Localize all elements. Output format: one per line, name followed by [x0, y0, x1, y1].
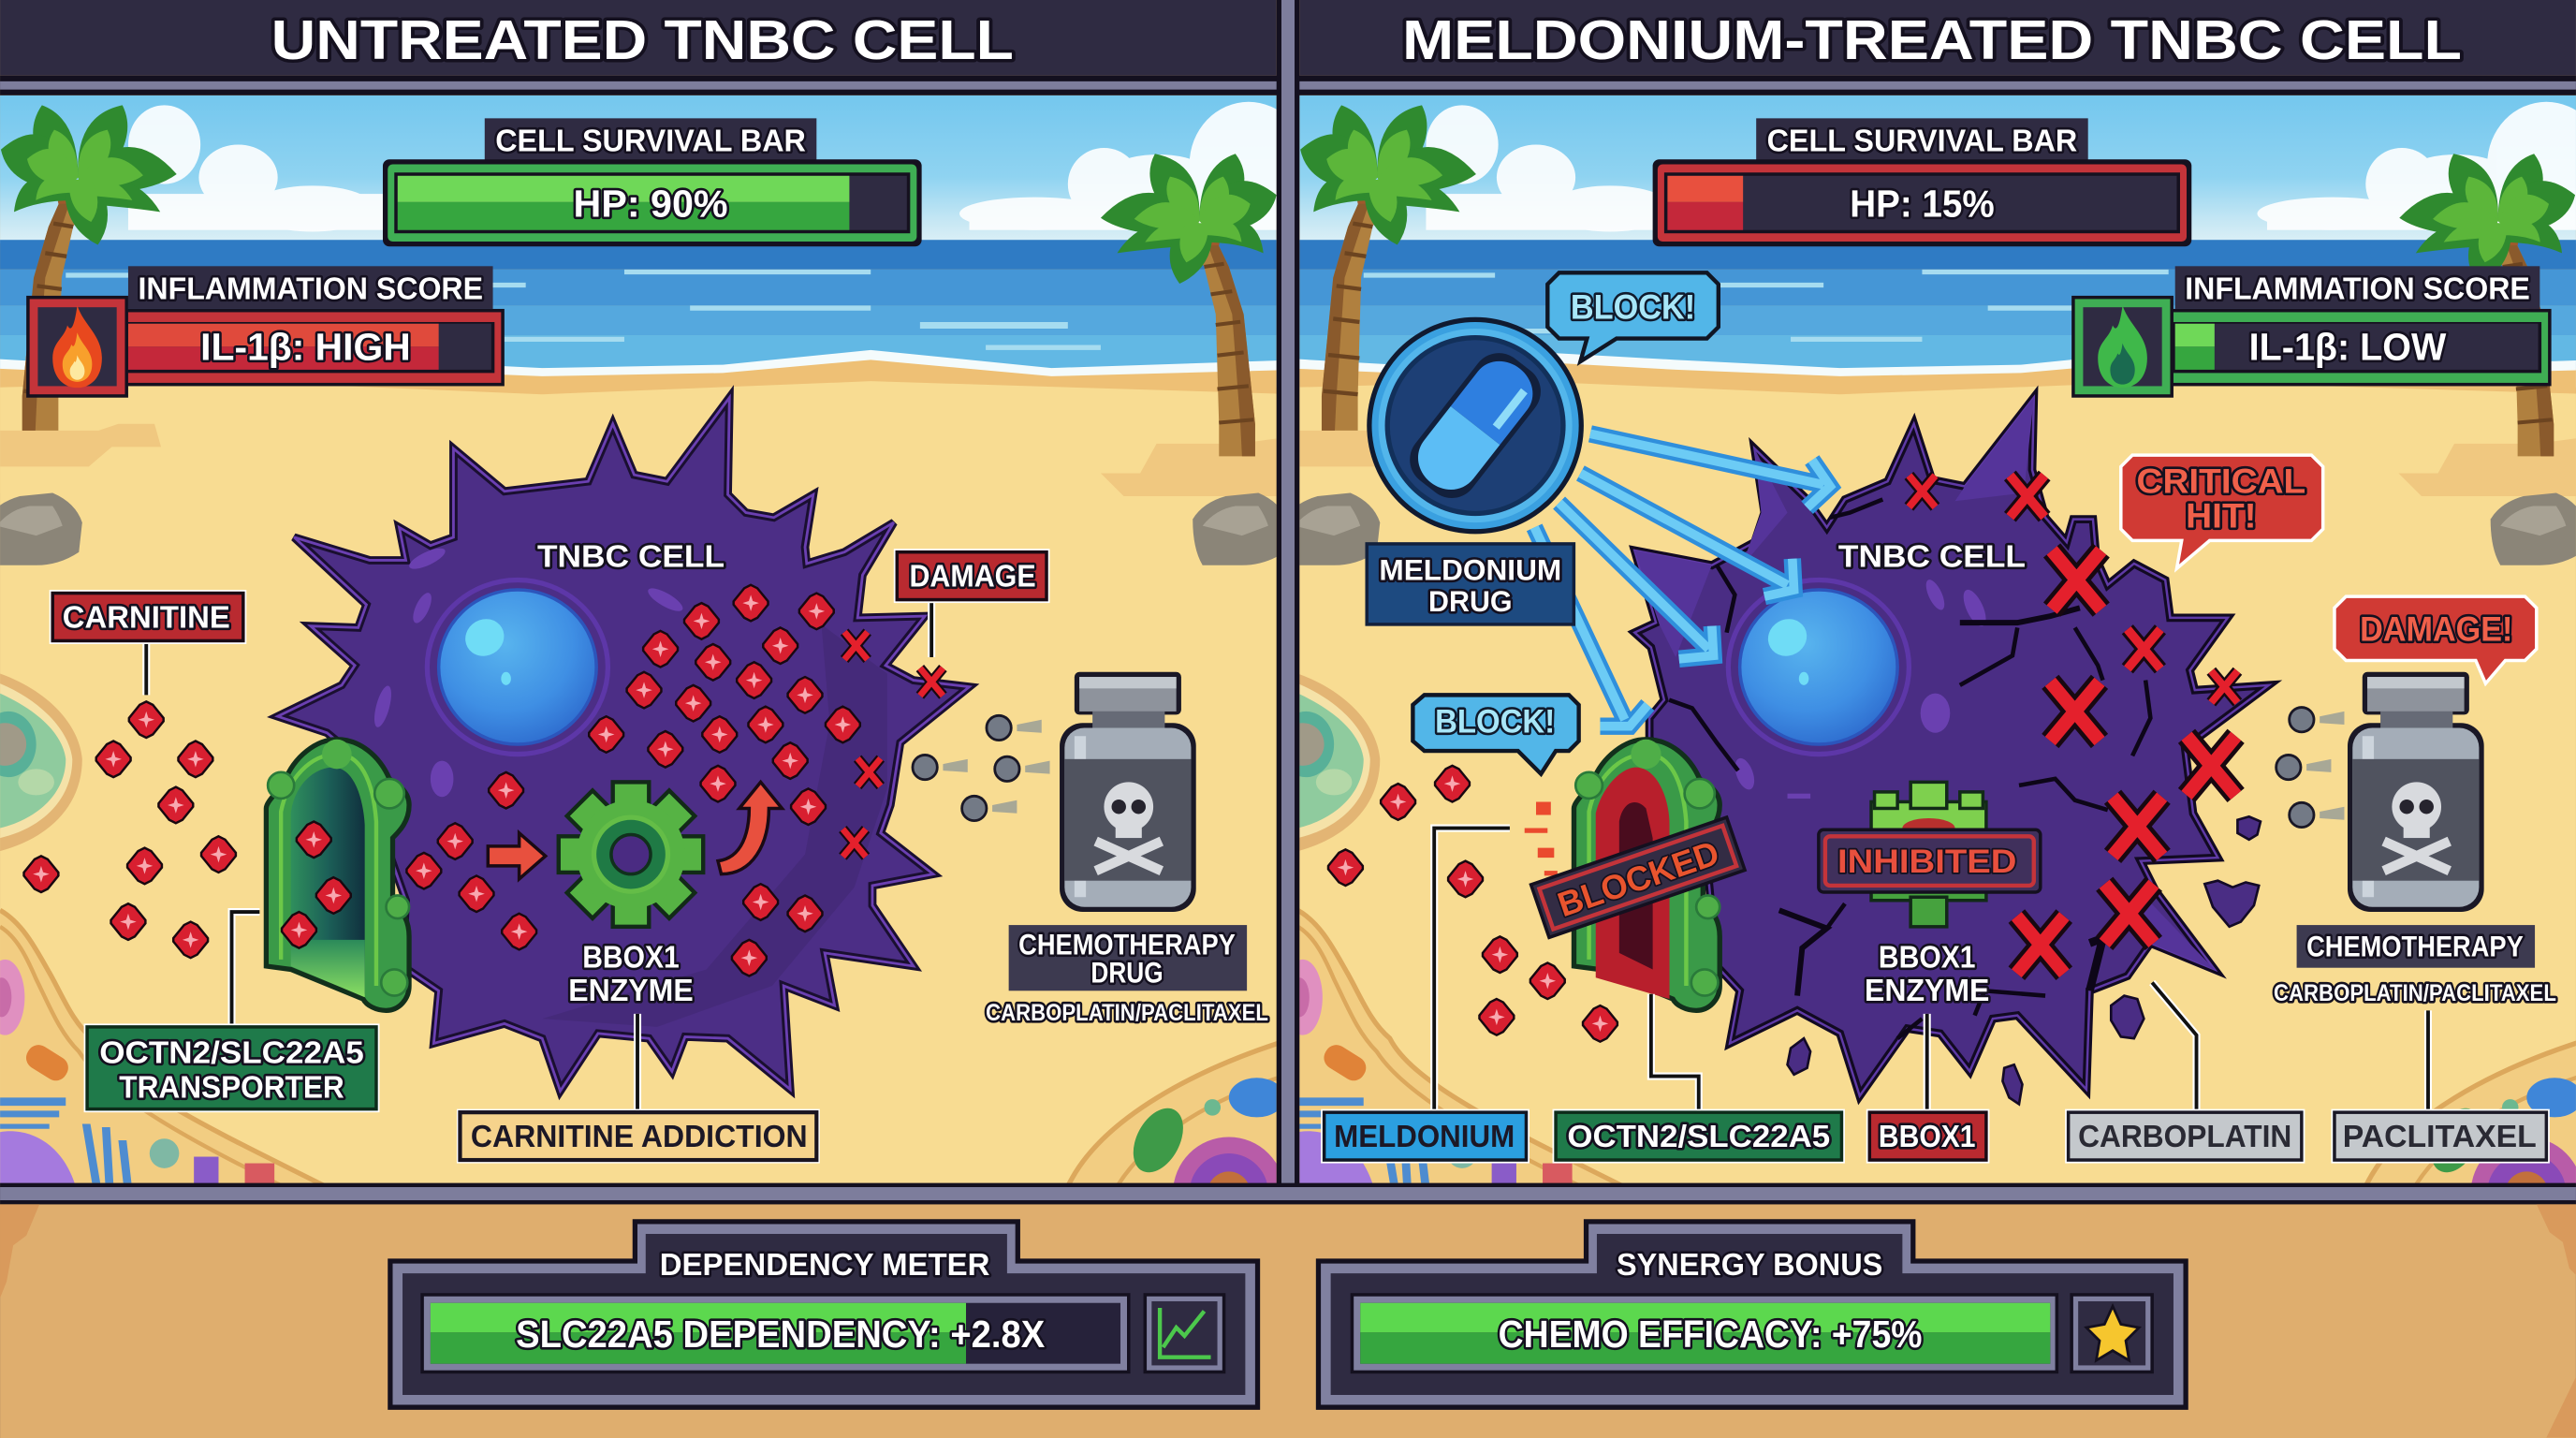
widget: left inflammation score	[26, 266, 505, 398]
callout: damage: DAMAGE!	[2360, 609, 2512, 648]
label: inhibited: INHIBITED	[1837, 844, 2016, 880]
icon: palm tree right	[2399, 154, 2575, 456]
tag: carboplatin	[2065, 1109, 2305, 1164]
header: left title bar: UNTREATED TNBC CELL	[271, 8, 1014, 71]
label: TNBC cell treated: TNBC CELL	[1838, 539, 2026, 574]
icon: chemotherapy vial left	[1060, 672, 1196, 912]
carnitine diamonds outside	[24, 701, 236, 958]
icon: chemotherapy vial right	[2348, 672, 2484, 912]
cell: untreated TNBC cell	[278, 398, 970, 1091]
label: carnitine addiction	[457, 1109, 820, 1164]
connector lines right	[1434, 829, 2428, 1110]
tag: meldonium	[1321, 1109, 1530, 1164]
tag: OCTN2/SLC22A5: OCTN2/SLC22A5	[1567, 1120, 1830, 1154]
label: blocked stamp	[1531, 817, 1745, 937]
label: carnitine	[50, 590, 246, 644]
panel: left beach scene	[0, 95, 1308, 1249]
cell debris	[1788, 816, 2261, 1104]
icon: right palm tree	[1101, 154, 1277, 456]
diamonds outside treated cell	[1328, 766, 1617, 1042]
label: BBOX1 enzyme	[568, 941, 694, 1008]
label: carboplatin/paclitaxel left: CARBOPLATIN/PACLITAXEL	[986, 1001, 1268, 1026]
damage X marks	[1909, 476, 2237, 974]
label: carnitine addiction: CARNITINE ADDICTION	[471, 1120, 808, 1154]
transporter: blocked portal	[1525, 740, 1720, 1010]
cell: treated and cracked TNBC cell	[1634, 398, 2269, 1104]
widget: left survival bar: HP: 90%	[574, 183, 728, 226]
panel: bottom tray	[0, 1204, 2576, 1438]
label: BBOX1 enzyme treated: ENZYME	[1865, 974, 1989, 1008]
label: damage	[894, 549, 1050, 603]
connector lines left	[146, 603, 931, 1110]
label: BBOX1 enzyme treated	[1865, 941, 1989, 1008]
label: inhibited	[1819, 829, 2041, 892]
label: chemotherapy right: CHEMOTHERAPY	[2306, 929, 2524, 962]
callout: critical hit: CRITICAL	[2136, 462, 2305, 501]
label: BBOX1 enzyme treated: BBOX1	[1879, 941, 1975, 976]
widget: right inflammation score: INFLAMMATION SCORE	[2185, 271, 2530, 306]
tag: carboplatin: CARBOPLATIN	[2078, 1120, 2291, 1154]
nucleus	[1728, 580, 1909, 755]
tag: OCTN2/SLC22A5	[1553, 1109, 1845, 1164]
callout: critical hit: HIT!	[2186, 496, 2257, 535]
widget: right survival bar: HP: 15%	[1850, 183, 1995, 226]
label: BBOX1 enzyme: ENZYME	[568, 974, 694, 1008]
widget: right survival bar: CELL SURVIVAL BAR	[1767, 124, 2077, 158]
label: meldonium drug: MELDONIUM	[1379, 553, 1561, 587]
chemo pellets right	[2276, 708, 2344, 828]
icon: inhibited gear	[1871, 782, 1986, 927]
widget: left inflammation score: INFLAMMATION SCORE	[138, 271, 483, 306]
icon: palm tree left	[1300, 105, 1476, 431]
widget: left survival bar: CELL SURVIVAL BAR	[495, 124, 806, 158]
icon: rising chart	[1160, 1308, 1211, 1357]
header: left title bar	[0, 0, 1277, 76]
tag: BBOX1: BBOX1	[1879, 1120, 1975, 1154]
label: TNBC cell: TNBC CELL	[537, 539, 724, 574]
arrow: carnitine to gear	[488, 833, 546, 879]
chemo pellets left	[913, 715, 1050, 821]
widget: left survival bar	[383, 118, 922, 246]
meter: dependency	[388, 1219, 1260, 1410]
nucleus	[427, 580, 607, 755]
icon: left palm tree	[1, 105, 177, 431]
arrow: gear output	[718, 782, 782, 874]
cell cracks	[1669, 500, 2150, 1038]
arrows: meldonium blocks	[1534, 433, 1830, 726]
transporter: open portal	[266, 740, 409, 1010]
sparks	[1525, 801, 1558, 875]
label: carnitine: CARNITINE	[63, 600, 230, 635]
tag: paclitaxel	[2331, 1109, 2550, 1164]
widget: right inflammation score: IL-1β: LOW	[2249, 325, 2447, 368]
meter: synergy bonus: SYNERGY BONUS	[1617, 1248, 1882, 1283]
callout: block portal: BLOCK!	[1435, 704, 1555, 741]
label: blocked stamp: BLOCKED	[1553, 833, 1724, 924]
label: transporter: TRANSPORTER	[119, 1070, 344, 1105]
label: damage: DAMAGE	[909, 560, 1036, 594]
tag: paclitaxel: PACLITAXEL	[2343, 1120, 2537, 1154]
label: meldonium drug: DRUG	[1428, 584, 1513, 618]
damage marks	[842, 632, 943, 857]
widget: right inflammation score	[2071, 266, 2552, 398]
label: transporter	[84, 1023, 379, 1112]
label: chemotherapy drug: DRUG	[1090, 956, 1164, 990]
callout: block portal	[1412, 695, 1579, 774]
icon: flame high	[52, 305, 102, 388]
label: transporter: OCTN2/SLC22A5	[99, 1036, 364, 1071]
meter: dependency: SLC22A5 DEPENDENCY: +2.8X	[516, 1313, 1045, 1356]
tag: BBOX1	[1866, 1109, 1989, 1164]
icon: star	[2086, 1306, 2139, 1360]
icon: meldonium pill	[1367, 317, 1584, 534]
label: chemotherapy drug: CHEMOTHERAPY	[1018, 928, 1236, 961]
icon: BBOX1 gear	[559, 782, 703, 927]
header: right title bar	[1299, 0, 2576, 76]
label: meldonium drug	[1367, 544, 1573, 624]
meter: dependency: DEPENDENCY METER	[660, 1248, 989, 1283]
carnitine diamonds in the cell	[406, 585, 860, 976]
panel: right beach scene	[1278, 95, 2576, 1249]
label: chemotherapy drug	[1009, 925, 1247, 990]
callout: critical hit	[2121, 455, 2323, 568]
callout: block top	[1547, 272, 1719, 361]
label: BBOX1 enzyme: BBOX1	[582, 941, 680, 976]
header: right title bar: MELDONIUM-TREATED TNBC CELL	[1402, 8, 2462, 71]
meter: synergy bonus: CHEMO EFFICACY: +75%	[1499, 1313, 1922, 1356]
widget: left inflammation score: IL-1β: HIGH	[200, 325, 411, 368]
icon: flame low	[2098, 305, 2147, 388]
callout: damage	[2334, 596, 2537, 683]
meter: synergy bonus	[1316, 1219, 2188, 1410]
callout: block top: BLOCK!	[1571, 287, 1695, 326]
tag: meldonium: MELDONIUM	[1334, 1120, 1515, 1154]
widget: right survival bar	[1653, 118, 2191, 246]
